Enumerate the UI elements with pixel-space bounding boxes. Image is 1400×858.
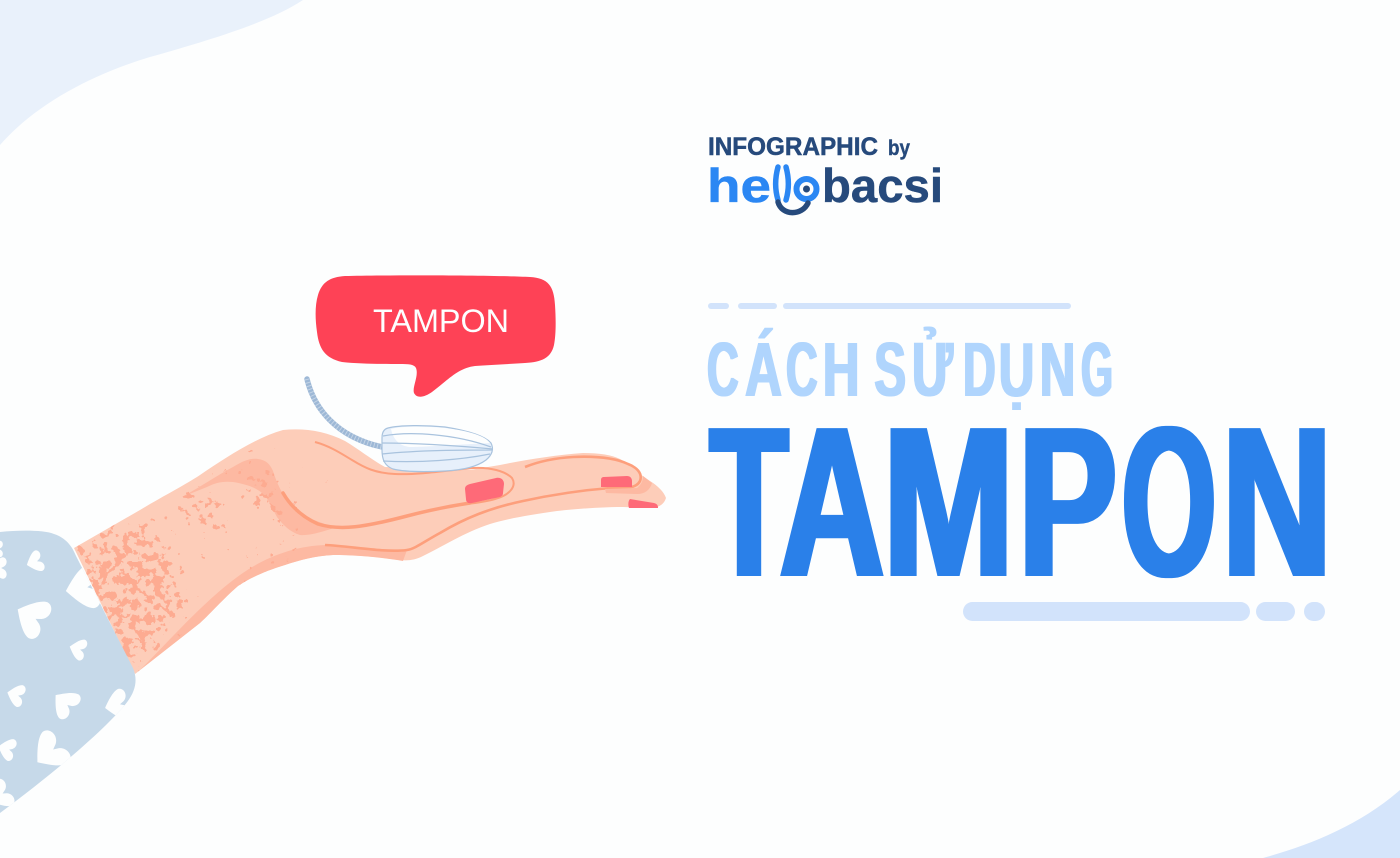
heading: cách sử dụng: Ụ bbox=[999, 327, 1034, 413]
heading: tampon: O bbox=[1122, 381, 1216, 622]
palm shading bbox=[182, 459, 337, 535]
nail: thumb bbox=[465, 478, 504, 503]
bubble label: TAMPON bbox=[373, 303, 509, 339]
wrist shading bbox=[135, 545, 407, 674]
hand bbox=[74, 429, 666, 674]
heading: cách sử dụng: C bbox=[786, 327, 818, 413]
sleeve with hearts bbox=[0, 531, 136, 814]
background corner: bottom right bbox=[1263, 790, 1400, 858]
heading: cách sử dụng: D bbox=[963, 327, 996, 413]
logo tagline: INFOGRAPHIC bbox=[708, 133, 878, 161]
bottom decorative bars bbox=[963, 602, 1325, 621]
heading: cách sử dụng: N bbox=[1040, 327, 1075, 413]
tampon ridges bbox=[382, 434, 493, 462]
logo stethoscope bbox=[778, 202, 808, 213]
tampon body bbox=[382, 426, 492, 472]
logo tagline: by: by bbox=[888, 137, 910, 160]
finger crease line bbox=[283, 493, 470, 527]
heading: cách sử dụng: H bbox=[823, 327, 860, 413]
logo stylised ll and o bbox=[776, 167, 816, 200]
background corner: top left bbox=[0, 0, 303, 145]
heading: cách sử dụng: G bbox=[1081, 327, 1113, 413]
heading: tampon: T bbox=[710, 381, 788, 622]
tampon string bbox=[307, 379, 382, 447]
nail: index finger bbox=[601, 476, 632, 487]
skin texture speckles bbox=[70, 462, 330, 680]
heading: cách sử dụng: S bbox=[874, 327, 906, 413]
heading: cách sử dụng: Ử bbox=[912, 326, 953, 413]
heading: cách sử dụng: C bbox=[707, 327, 739, 413]
tampon highlight bbox=[391, 427, 490, 447]
speech bubble bbox=[316, 275, 556, 397]
finger outline bbox=[325, 457, 641, 551]
heading: tampon: A bbox=[780, 381, 884, 622]
logo wordmark: he: he bbox=[707, 159, 771, 212]
tampon bbox=[307, 379, 493, 472]
heading: tampon: M bbox=[883, 381, 1014, 622]
nail: middle finger bbox=[628, 499, 658, 508]
heading: tampon: P bbox=[1018, 381, 1117, 622]
logo bbox=[707, 133, 943, 213]
illustration: hand holding tampon bbox=[70, 429, 666, 680]
thumb outline bbox=[315, 442, 514, 504]
heading: tampon: N bbox=[1222, 381, 1332, 622]
fingertip shading bbox=[605, 476, 652, 494]
logo wordmark: bacsi: bacsi bbox=[822, 159, 943, 212]
heading: cách sử dụng: Á bbox=[745, 326, 782, 413]
top decorative bars bbox=[708, 303, 1071, 309]
